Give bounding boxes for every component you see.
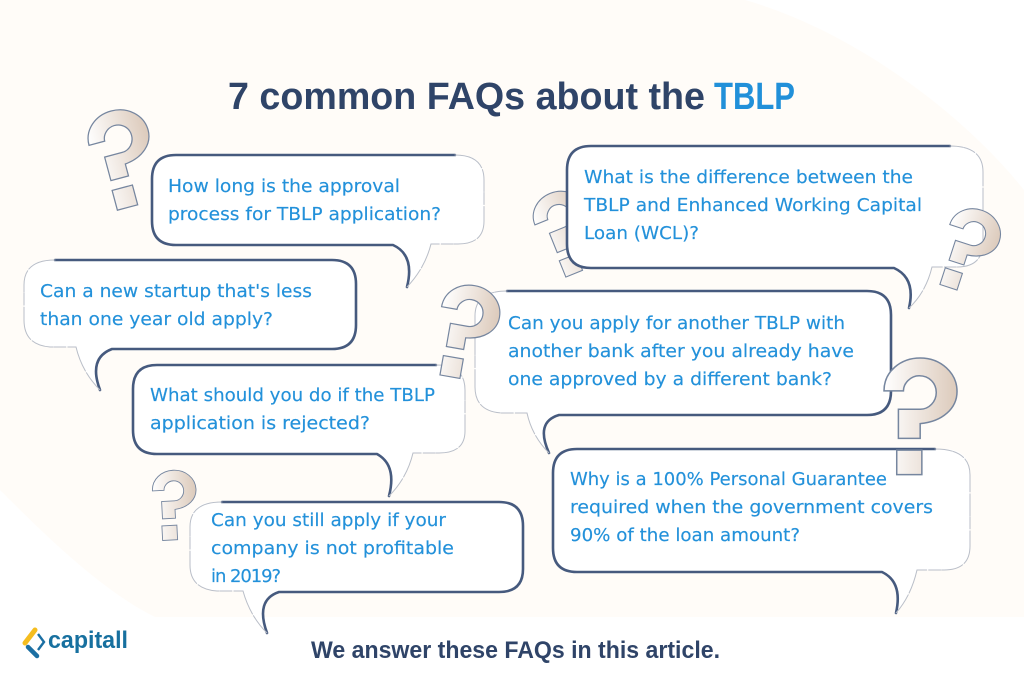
- question text: required when the government covers: [570, 497, 933, 518]
- question text: Can you apply for another TBLP with: [508, 313, 845, 334]
- question text: How long is the approval: [168, 176, 400, 197]
- panel: approval process bubble: [152, 155, 484, 287]
- title: TBLP: [714, 76, 795, 118]
- question text: What is the difference between the: [584, 167, 913, 188]
- icon: question mark top left: [82, 103, 166, 213]
- panel: not profitable bubble: [190, 502, 523, 633]
- question text: process for TBLP application?: [168, 204, 441, 225]
- question text: another bank after you already have: [508, 341, 854, 362]
- panel: WCL difference bubble: [567, 146, 983, 308]
- title: 7 common FAQs about the: [228, 76, 705, 118]
- question text: application is rejected?: [150, 413, 370, 434]
- icon: question mark left of another bank bubble: [430, 281, 504, 383]
- panel: another bank bubble: [475, 291, 891, 453]
- icon: question mark right of WCL bubble: [931, 202, 1007, 298]
- question text: Why is a 100% Personal Guarantee: [570, 469, 887, 490]
- question text: Loan (WCL)?: [584, 223, 699, 244]
- question text: Can you still apply if your: [211, 510, 447, 531]
- question text: in 2019?: [211, 566, 281, 587]
- footer text: We answer these FAQs in this article.: [311, 637, 720, 664]
- icon: question mark behind WCL bubble: [526, 183, 606, 281]
- question text: What should you do if the TBLP: [150, 385, 435, 406]
- question text: company is not profitable: [211, 538, 454, 559]
- logo: capitall: capitall: [48, 627, 128, 654]
- question text: Can a new startup that's less: [40, 281, 312, 302]
- question text: than one year old apply?: [40, 309, 273, 330]
- panel: rejected application bubble: [133, 365, 465, 496]
- question text: TBLP and Enhanced Working Capital: [583, 195, 922, 216]
- icon: question mark bottom left: [151, 469, 199, 541]
- panel: new startup bubble: [24, 260, 356, 390]
- icon: large question mark: [884, 358, 957, 475]
- panel: personal guarantee bubble: [553, 449, 970, 613]
- question text: 90% of the loan amount?: [570, 525, 800, 546]
- question text: one approved by a different bank?: [508, 369, 832, 390]
